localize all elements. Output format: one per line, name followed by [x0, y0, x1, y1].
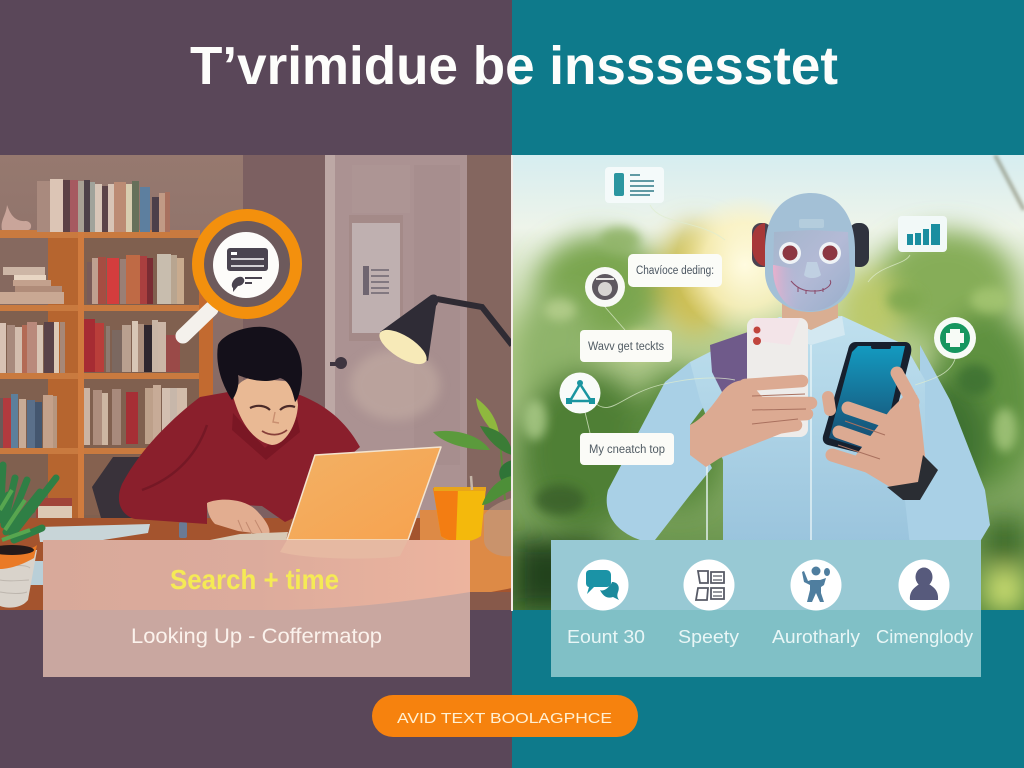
bottom pill: AVID TEXT BOOLAGPHCE: [397, 710, 612, 727]
person in red sweater: [119, 327, 360, 535]
floating icon: green cross: [934, 317, 976, 359]
floating label: My cneatch top: [580, 433, 674, 465]
potted plant left: [0, 465, 56, 608]
shirt: [606, 316, 990, 540]
hand holding white phone: [690, 380, 811, 467]
room wall: [0, 155, 511, 518]
floating label: Wavv get teckts: [580, 330, 672, 362]
title: T’vrimidue be insssesstet: [190, 36, 838, 96]
door: [325, 155, 467, 525]
feature: Aurotharly: [772, 560, 861, 647]
backpack strap: [710, 332, 747, 392]
feature: Cimenglody: [876, 560, 974, 647]
floating icon: badge: [585, 267, 625, 307]
center divider: [511, 155, 513, 611]
background: right teal half: [512, 0, 1024, 768]
feature: Aurotharly: Aurotharly: [772, 626, 861, 647]
panel: search + time caption: [43, 540, 470, 677]
floating card: bar chart icon: [898, 216, 947, 252]
panel: right scene, person with AI mask and phones: [513, 155, 1024, 610]
desk: [0, 510, 512, 610]
callout lines: [585, 205, 955, 433]
feature: Cimenglody: Cimenglody: [876, 626, 974, 647]
park backdrop: [513, 155, 1024, 610]
chair back: [92, 457, 140, 518]
feature: Speety: [678, 560, 740, 647]
laptop: [205, 447, 441, 541]
floating label: My cneatch top: My cneatch top: [589, 444, 665, 456]
background: left plum half: [0, 0, 512, 768]
wristwatch: [887, 455, 938, 500]
floating label: Chavíoce deding: Chavíoce deding:: [636, 265, 714, 277]
panel: left scene, person searching at desk: [0, 155, 512, 610]
heading: search + time: Search + time: [170, 564, 339, 595]
ornament on shelf: [2, 205, 31, 230]
dark phone: [823, 342, 911, 458]
floating card: checklist icon: [605, 167, 664, 203]
floating label: Chavíoce deding: [628, 254, 722, 287]
floating icon: network triangle: [560, 372, 600, 414]
bookshelf: [0, 230, 213, 530]
feature: Speety: Speety: [678, 626, 740, 647]
magnifying glass icon: [183, 215, 296, 336]
books: [0, 179, 187, 518]
mug: [433, 476, 486, 542]
hand holding dark phone: [828, 373, 925, 497]
text: caption: Looking Up - Coffermatop: [131, 625, 382, 648]
white phone: [747, 318, 808, 437]
AI mask head: [752, 193, 869, 345]
feature: Eount 30: [567, 560, 645, 647]
panel: features row: [551, 540, 981, 677]
glass jar and right plant: [433, 398, 512, 556]
floating label: Wavv get teckts: Wavv get teckts: [588, 341, 664, 353]
desk lamp: [379, 294, 511, 364]
bottom pill: [372, 695, 638, 737]
feature: Eount 30: Eount 30: [567, 626, 645, 647]
